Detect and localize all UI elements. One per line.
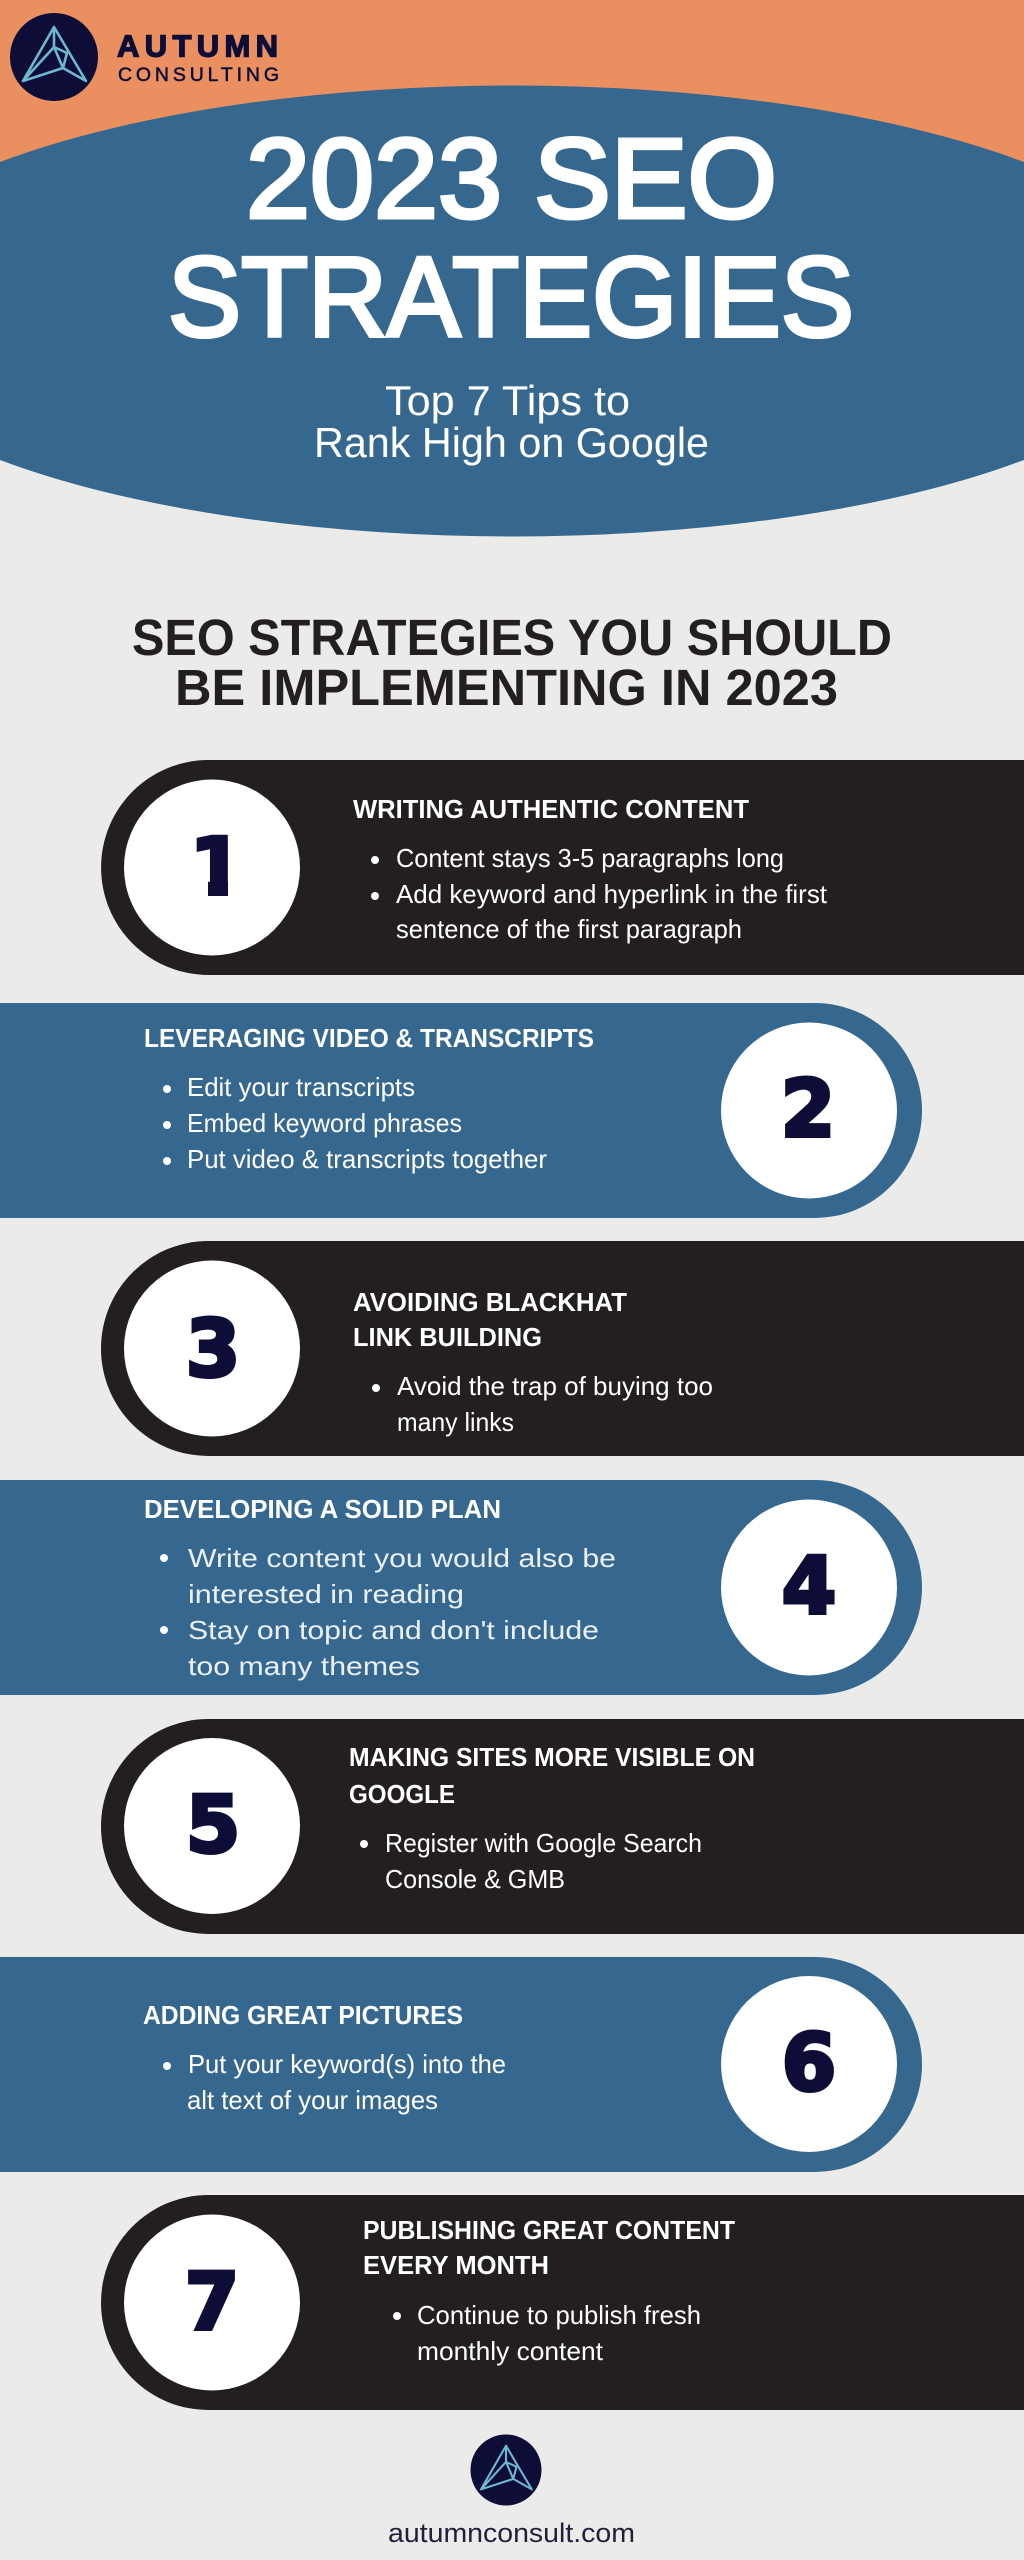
bullets 7: Continue to publish fresh (417, 2300, 701, 2330)
panel: strategy 5 (101, 1719, 1024, 1934)
bullets 3 (372, 1371, 713, 1437)
title: STRATEGIES (168, 234, 854, 360)
heading 3: LINK BUILDING (353, 1322, 542, 1352)
bullets 5 (360, 1828, 702, 1894)
number badge 2 (721, 1022, 897, 1198)
number badge 1 (124, 780, 300, 956)
number badge 2: 2 (781, 1065, 835, 1155)
number badge 3: 3 (186, 1305, 240, 1395)
footer url: autumnconsult.com (388, 2518, 635, 2548)
bullets 4: Write content you would also be (188, 1543, 616, 1573)
number badge 6: 6 (782, 2019, 836, 2109)
logo: Autumn Consulting (10, 13, 279, 101)
panel: strategy 2 (0, 1003, 922, 1218)
heading 5: GOOGLE (349, 1779, 455, 1809)
panel: strategy 4 (0, 1480, 922, 1695)
header panel: blue ellipse (0, 86, 1024, 536)
heading 3: AVOIDING BLACKHAT (353, 1287, 627, 1317)
bullets 6 (163, 2049, 506, 2115)
logo wordmark top: AUTUMN (117, 28, 278, 64)
bullets 5: Register with Google Search (385, 1828, 702, 1858)
number badge 5: 5 (186, 1781, 240, 1871)
heading 5: MAKING SITES MORE VISIBLE ON (349, 1742, 755, 1772)
bullets 2: Put video & transcripts together (187, 1144, 547, 1174)
header background: orange (0, 0, 1024, 310)
bullets 4: interested in reading (188, 1579, 464, 1609)
panel: strategy 3 (101, 1241, 1024, 1456)
bullets 2: Edit your transcripts (187, 1072, 415, 1102)
number badge 5 (124, 1738, 300, 1914)
heading 7: EVERY MONTH (363, 2250, 549, 2280)
panel: strategy 7 (101, 2195, 1024, 2410)
icon: logo mark (10, 13, 98, 101)
heading 5 (349, 1742, 755, 1809)
number badge 4: 4 (782, 1542, 836, 1632)
bullets 1: Content stays 3-5 paragraphs long (396, 843, 784, 873)
heading 7: PUBLISHING GREAT CONTENT (363, 2215, 735, 2245)
heading 7 (363, 2215, 735, 2280)
title: 2023 SEO (246, 116, 777, 242)
heading 3 (353, 1287, 627, 1352)
bullets 7 (393, 2300, 701, 2366)
bullets 5: Console & GMB (385, 1864, 565, 1894)
heading 1: WRITING AUTHENTIC CONTENT (353, 794, 749, 824)
panel: strategy 6 (0, 1957, 922, 2172)
number badge 7: 7 (185, 2258, 239, 2348)
subtitle: Rank High on Google (314, 419, 709, 466)
number badge 7 (124, 2214, 300, 2390)
bullets 4: too many themes (188, 1651, 420, 1681)
bullets 3: Avoid the trap of buying too (397, 1371, 713, 1401)
number badge 1: 1 (190, 823, 244, 913)
section heading: SEO STRATEGIES YOU SHOULD (132, 609, 892, 666)
number badge 6 (721, 1976, 897, 2152)
section heading: BE IMPLEMENTING IN 2023 (175, 659, 838, 716)
number badge 4 (721, 1500, 897, 1676)
bullets 2: Embed keyword phrases (187, 1108, 462, 1138)
bullets 1: Add keyword and hyperlink in the first (396, 879, 828, 909)
number badge 3 (124, 1260, 300, 1436)
panel: strategy 1 (101, 760, 1024, 975)
section heading (132, 609, 892, 716)
bullets 4 (160, 1543, 616, 1681)
bullets 4: Stay on topic and don't include (188, 1615, 599, 1645)
subtitle: Top 7 Tips to (385, 377, 630, 424)
bullets 2 (163, 1072, 547, 1174)
bullets 7: monthly content (417, 2336, 604, 2366)
bullets 1 (371, 843, 828, 944)
heading 4: DEVELOPING A SOLID PLAN (144, 1494, 501, 1524)
bullets 6: alt text of your images (187, 2085, 438, 2115)
bullets 1: sentence of the first paragraph (396, 914, 742, 944)
logo wordmark bottom: CONSULTING (118, 64, 279, 86)
heading 6: ADDING GREAT PICTURES (143, 2000, 463, 2030)
footer logo (470, 2434, 542, 2506)
bullets 3: many links (397, 1407, 514, 1437)
heading 2: LEVERAGING VIDEO & TRANSCRIPTS (144, 1023, 594, 1053)
bullets 6: Put your keyword(s) into the (188, 2049, 506, 2079)
subtitle (314, 377, 709, 466)
title (168, 116, 854, 360)
